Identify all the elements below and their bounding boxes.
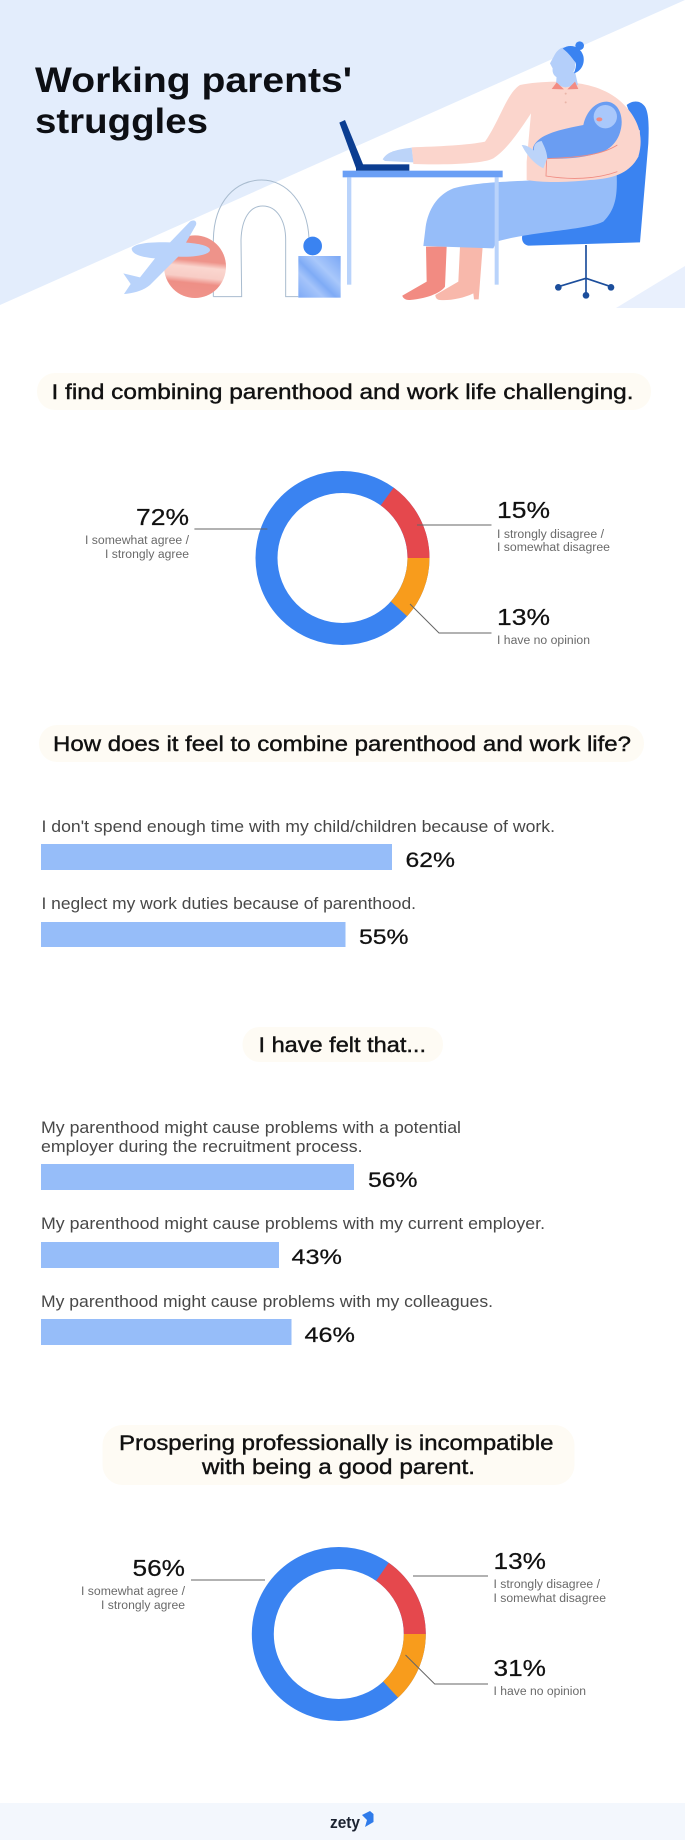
- heading: [37, 373, 651, 410]
- callout: 13%: [413, 1548, 606, 1605]
- callout: 15%: 15%: [497, 497, 550, 523]
- heading: [39, 725, 644, 762]
- bar: 43%: My parenthood might cause problems with my current employer.: [41, 1215, 545, 1233]
- bar: 55%: 55%: [359, 925, 408, 949]
- illustration: toys: [123, 180, 341, 298]
- bar: 62%: [41, 818, 555, 872]
- section: how does it feel: [39, 725, 644, 949]
- section: I have felt that: [41, 1027, 545, 1347]
- icon: hand on keyboard: [383, 148, 413, 162]
- callout: 13%: I have no opinion: [497, 635, 590, 647]
- callout: 13%: I strongly disagree /: [494, 1579, 601, 1591]
- callout: 56%: I strongly agree: [101, 1600, 185, 1612]
- bar: 62%: I don't spend enough time with my child/children because of work.: [42, 818, 555, 836]
- bar: 46%: 46%: [304, 1323, 355, 1347]
- callout: 56%: [81, 1555, 265, 1612]
- bar: 62%: 62%: [406, 848, 455, 872]
- callout: 15%: I somewhat disagree: [497, 542, 610, 554]
- callout: 56%: I somewhat agree /: [81, 1586, 186, 1598]
- callout: 13%: 13%: [497, 604, 550, 630]
- icon: logo mark: [362, 1811, 374, 1827]
- bar: 55%: I neglect my work duties because of parenthood.: [42, 895, 416, 913]
- icon: chair: [522, 101, 649, 299]
- bar: 56%: employer during the recruitment process.: [41, 1138, 362, 1156]
- callout: 15%: [417, 497, 610, 554]
- callout: 72%: I strongly agree: [105, 549, 189, 561]
- icon: arch: [213, 180, 309, 297]
- callout: 72%: [85, 504, 267, 561]
- heading: with being a good parent.: [201, 1456, 475, 1479]
- icon: laptop: [339, 120, 409, 171]
- bar: 46%: My parenthood might cause problems with my colleagues.: [41, 1293, 493, 1311]
- icon: baby-side hand: [522, 141, 547, 168]
- callout: 15%: I strongly disagree /: [497, 529, 605, 541]
- icon: airplane: [123, 221, 210, 294]
- title: struggles: [35, 102, 208, 141]
- heading: [242, 1027, 443, 1062]
- title: Working parents': [35, 61, 352, 100]
- section: prospering professionally: [81, 1425, 606, 1710]
- icon: neck and head: [550, 41, 584, 103]
- logo text: zety: [330, 1813, 360, 1832]
- icon: legs: [402, 247, 483, 300]
- icon: ball: [164, 235, 226, 298]
- heading: [102, 1425, 574, 1485]
- bar: 43%: [41, 1215, 545, 1269]
- callout: 13%: 13%: [494, 1548, 546, 1574]
- callout: 31%: [406, 1655, 586, 1698]
- callout: 72%: 72%: [136, 504, 189, 530]
- heading: I have felt that...: [258, 1034, 426, 1057]
- callout: 13%: I somewhat disagree: [494, 1593, 606, 1605]
- bar: 56%: [41, 1119, 461, 1192]
- bar: 55%: [41, 895, 416, 949]
- donut chart: [263, 1558, 415, 1710]
- callout: 31%: 31%: [494, 1655, 546, 1681]
- icon: blue ball on cube: [303, 237, 322, 255]
- bar: 43%: 43%: [292, 1245, 342, 1269]
- heading: Prospering professionally is incompatible: [119, 1432, 554, 1455]
- icon: table: [343, 171, 503, 285]
- illustration: woman at desk with baby: [339, 41, 649, 300]
- heading: How does it feel to combine parenthood and work life?: [53, 733, 631, 756]
- title: [35, 61, 352, 141]
- callout: 31%: I have no opinion: [494, 1686, 586, 1698]
- heading: I find combining parenthood and work life challenging.: [52, 381, 634, 404]
- icon: forearm: [546, 130, 640, 179]
- callout: 56%: 56%: [132, 1555, 185, 1581]
- bar: 56%: 56%: [368, 1168, 418, 1192]
- callout: 13%: [410, 604, 590, 647]
- icon: torso and arm: [412, 82, 641, 182]
- bar: 56%: My parenthood might cause problems with a potential: [41, 1119, 461, 1137]
- bar: 46%: [41, 1293, 493, 1347]
- section: challenging: [37, 373, 651, 647]
- donut chart: [266, 482, 419, 634]
- icon: baby: [533, 102, 622, 159]
- icon: skirt: [423, 173, 617, 248]
- callout: 72%: I somewhat agree /: [85, 535, 190, 547]
- icon: cube: [298, 256, 341, 298]
- header background: [0, 0, 685, 308]
- footer: [0, 1803, 685, 1840]
